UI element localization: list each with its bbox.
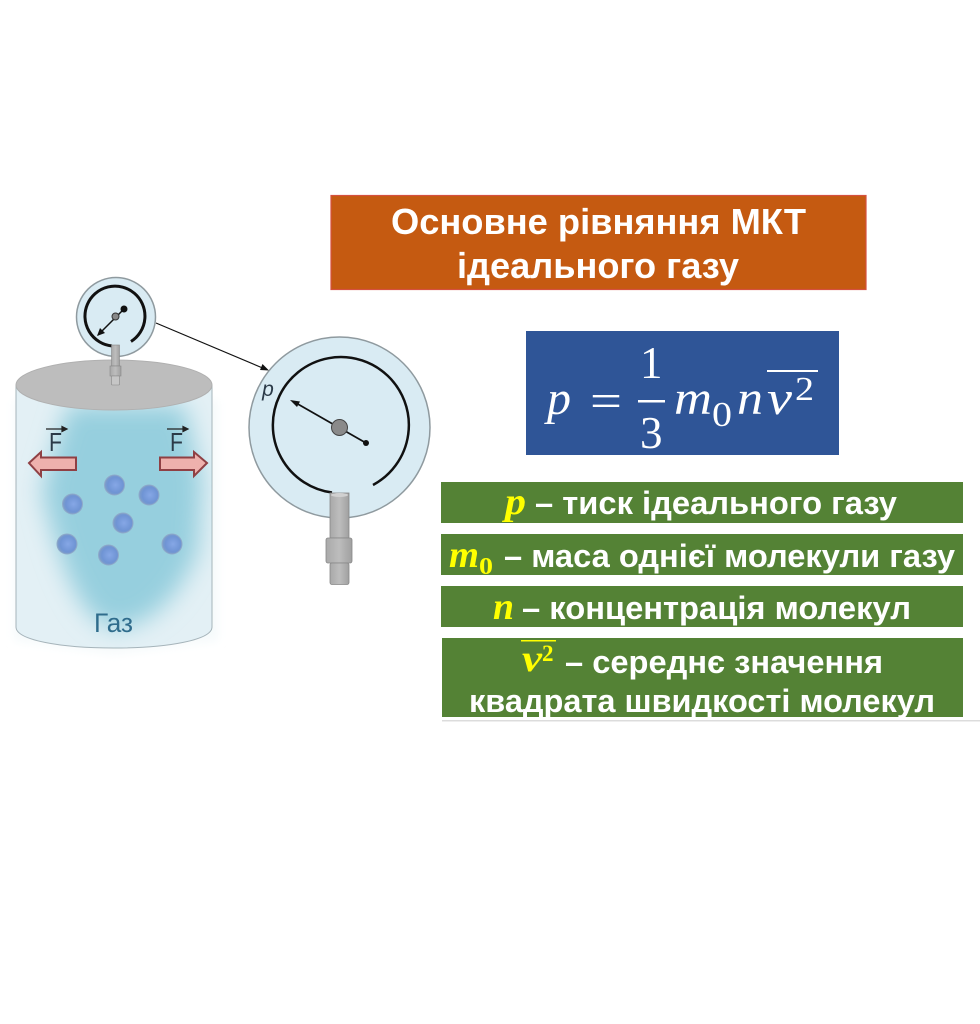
definition: p [441,481,963,523]
gas glow [42,405,202,628]
force arrow right [160,426,207,476]
title banner: ідеального газу [457,245,739,286]
title banner [331,196,866,290]
definition: m0: 0 [479,554,493,580]
formula panel [526,331,839,458]
definition: p: p [502,481,526,523]
formula panel: 0 [712,395,732,434]
definition: mean square velocity: 2 [542,641,554,666]
force arrow right: F [170,427,183,457]
illustration: gas cylinder [14,360,218,654]
cylinder body [16,385,212,648]
formula panel: p [544,372,571,425]
definition: m0: – маса однієї молекули газу [504,538,955,574]
molecules [57,475,182,565]
force arrow left [29,426,76,476]
formula panel: n [737,372,763,425]
definition: mean square velocity [442,638,963,719]
definition: mean square velocity: v [522,638,543,680]
definition: n [441,586,963,628]
formula panel: 1 [640,338,662,388]
force arrow left: F [49,427,62,457]
label: gas: Газ [94,608,133,638]
formula panel: = [590,375,622,428]
large pressure gauge [249,337,430,584]
definition: mean square velocity: – середнє значення [565,644,883,680]
formula panel: 2 [795,371,814,408]
formula panel: v [767,372,793,425]
formula panel: m [674,372,712,425]
definition: m0: m [449,534,479,576]
definition: n: n [493,586,514,628]
definition: n: – концентрація молекул [522,590,911,626]
definition: m0 [441,534,963,580]
arrow: small gauge to large gauge [156,323,269,370]
large pressure gauge: p [261,378,274,401]
small pressure gauge [76,278,156,385]
definition: mean square velocity: квадрата швидкості молекул [469,683,935,719]
definition: p: – тиск ідеального газу [535,485,897,521]
title banner: Основне рівняння МКТ [391,201,806,242]
cylinder lid [16,360,212,410]
formula panel: 3 [640,408,662,458]
